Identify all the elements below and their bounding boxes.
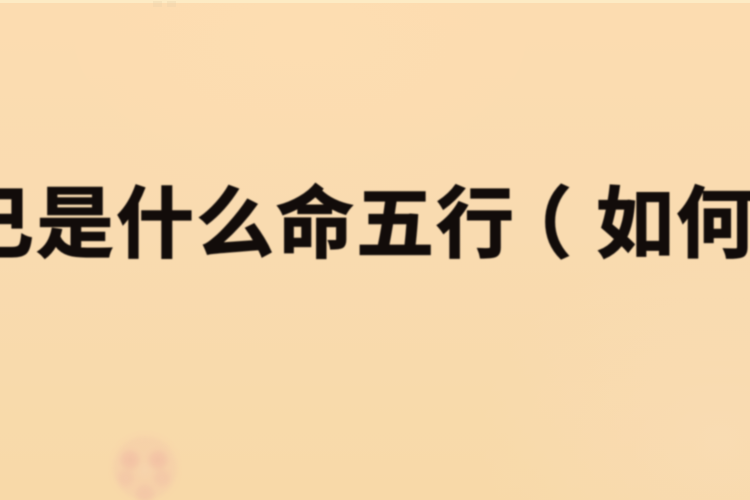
icon: faint flower at top edge — [153, 1, 176, 3]
top light strip — [0, 0, 750, 3]
icon: faint pink flower at bottom — [116, 440, 172, 500]
